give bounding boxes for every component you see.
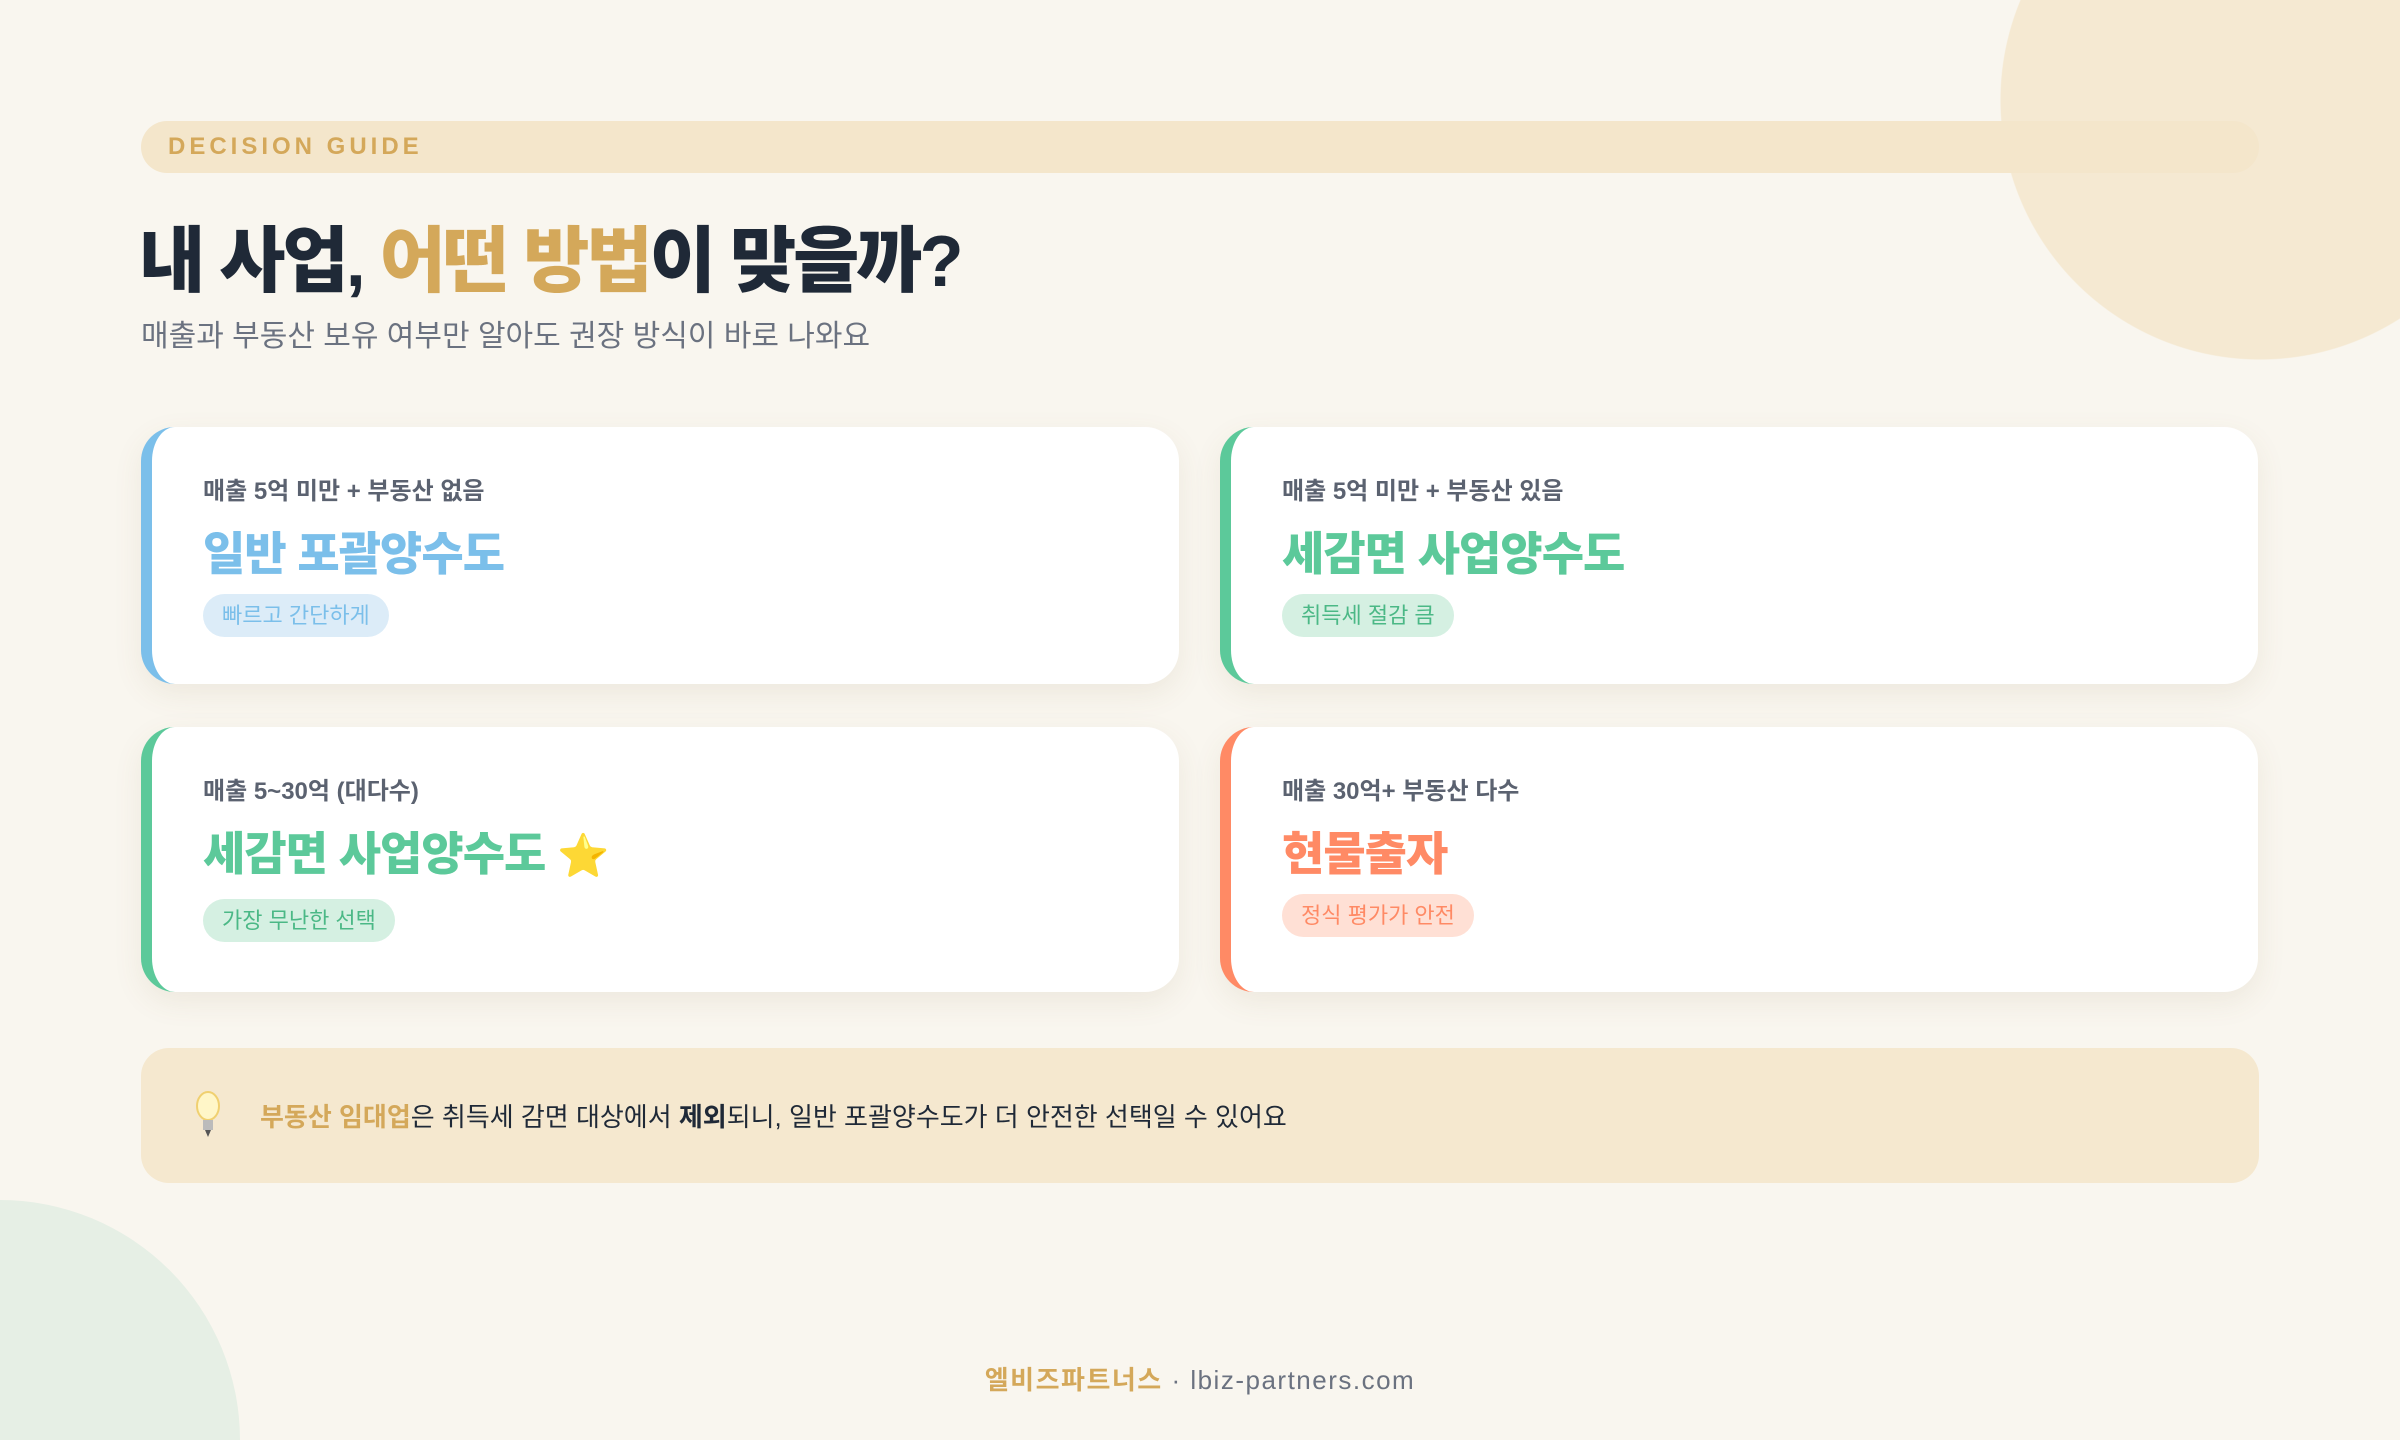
tip callout <box>141 1048 2259 1183</box>
icon: light bulb <box>196 1091 220 1137</box>
card tag <box>1282 594 1454 637</box>
card label: 매출 5~30억 (대다수) <box>203 778 419 805</box>
tip text: 부동산 임대업은 취득세 감면 대상에서 제외되니, 일반 포괄양수도가 더 안전한 선택일 수 있어요 <box>260 1102 1287 1132</box>
card title: 세감면 사업양수도 <box>1282 528 1624 580</box>
card tag: 빠르고 간단하게 <box>222 603 370 628</box>
card: 30억+ <box>1220 727 2258 992</box>
card tag: 정식 평가가 안전 <box>1301 903 1455 928</box>
card: 5~30억 <box>141 727 1179 992</box>
decorative circle top right <box>2000 0 2400 360</box>
card title: 세감면 사업양수도 ⭐ <box>203 828 608 880</box>
footer: 엘비즈파트너스 · lbiz-partners.com <box>985 1365 1415 1395</box>
decorative circle bottom left <box>0 1200 240 1440</box>
card title: 일반 포괄양수도 <box>203 528 504 580</box>
subtitle: 매출과 부동산 보유 여부만 알아도 권장 방식이 바로 나와요 <box>141 320 870 353</box>
title: 내 사업, 어떤 방법이 맞을까? <box>139 222 961 302</box>
card label: 매출 30억+ 부동산 다수 <box>1282 778 1519 805</box>
card: under 5억 with real estate <box>1220 427 2258 684</box>
header pill: decision guide <box>141 121 2259 173</box>
card tag: 가장 무난한 선택 <box>222 908 376 933</box>
card tag <box>203 594 389 637</box>
card tag <box>203 899 395 942</box>
header pill: decision guide: DECISION GUIDE <box>168 133 423 160</box>
card: under 5억 no real estate <box>141 427 1179 684</box>
card label: 매출 5억 미만 + 부동산 있음 <box>1282 478 1564 505</box>
card title: 현물출자 <box>1282 828 1447 880</box>
card tag <box>1282 894 1474 937</box>
card label: 매출 5억 미만 + 부동산 없음 <box>203 478 485 505</box>
card tag: 취득세 절감 큼 <box>1301 603 1435 628</box>
